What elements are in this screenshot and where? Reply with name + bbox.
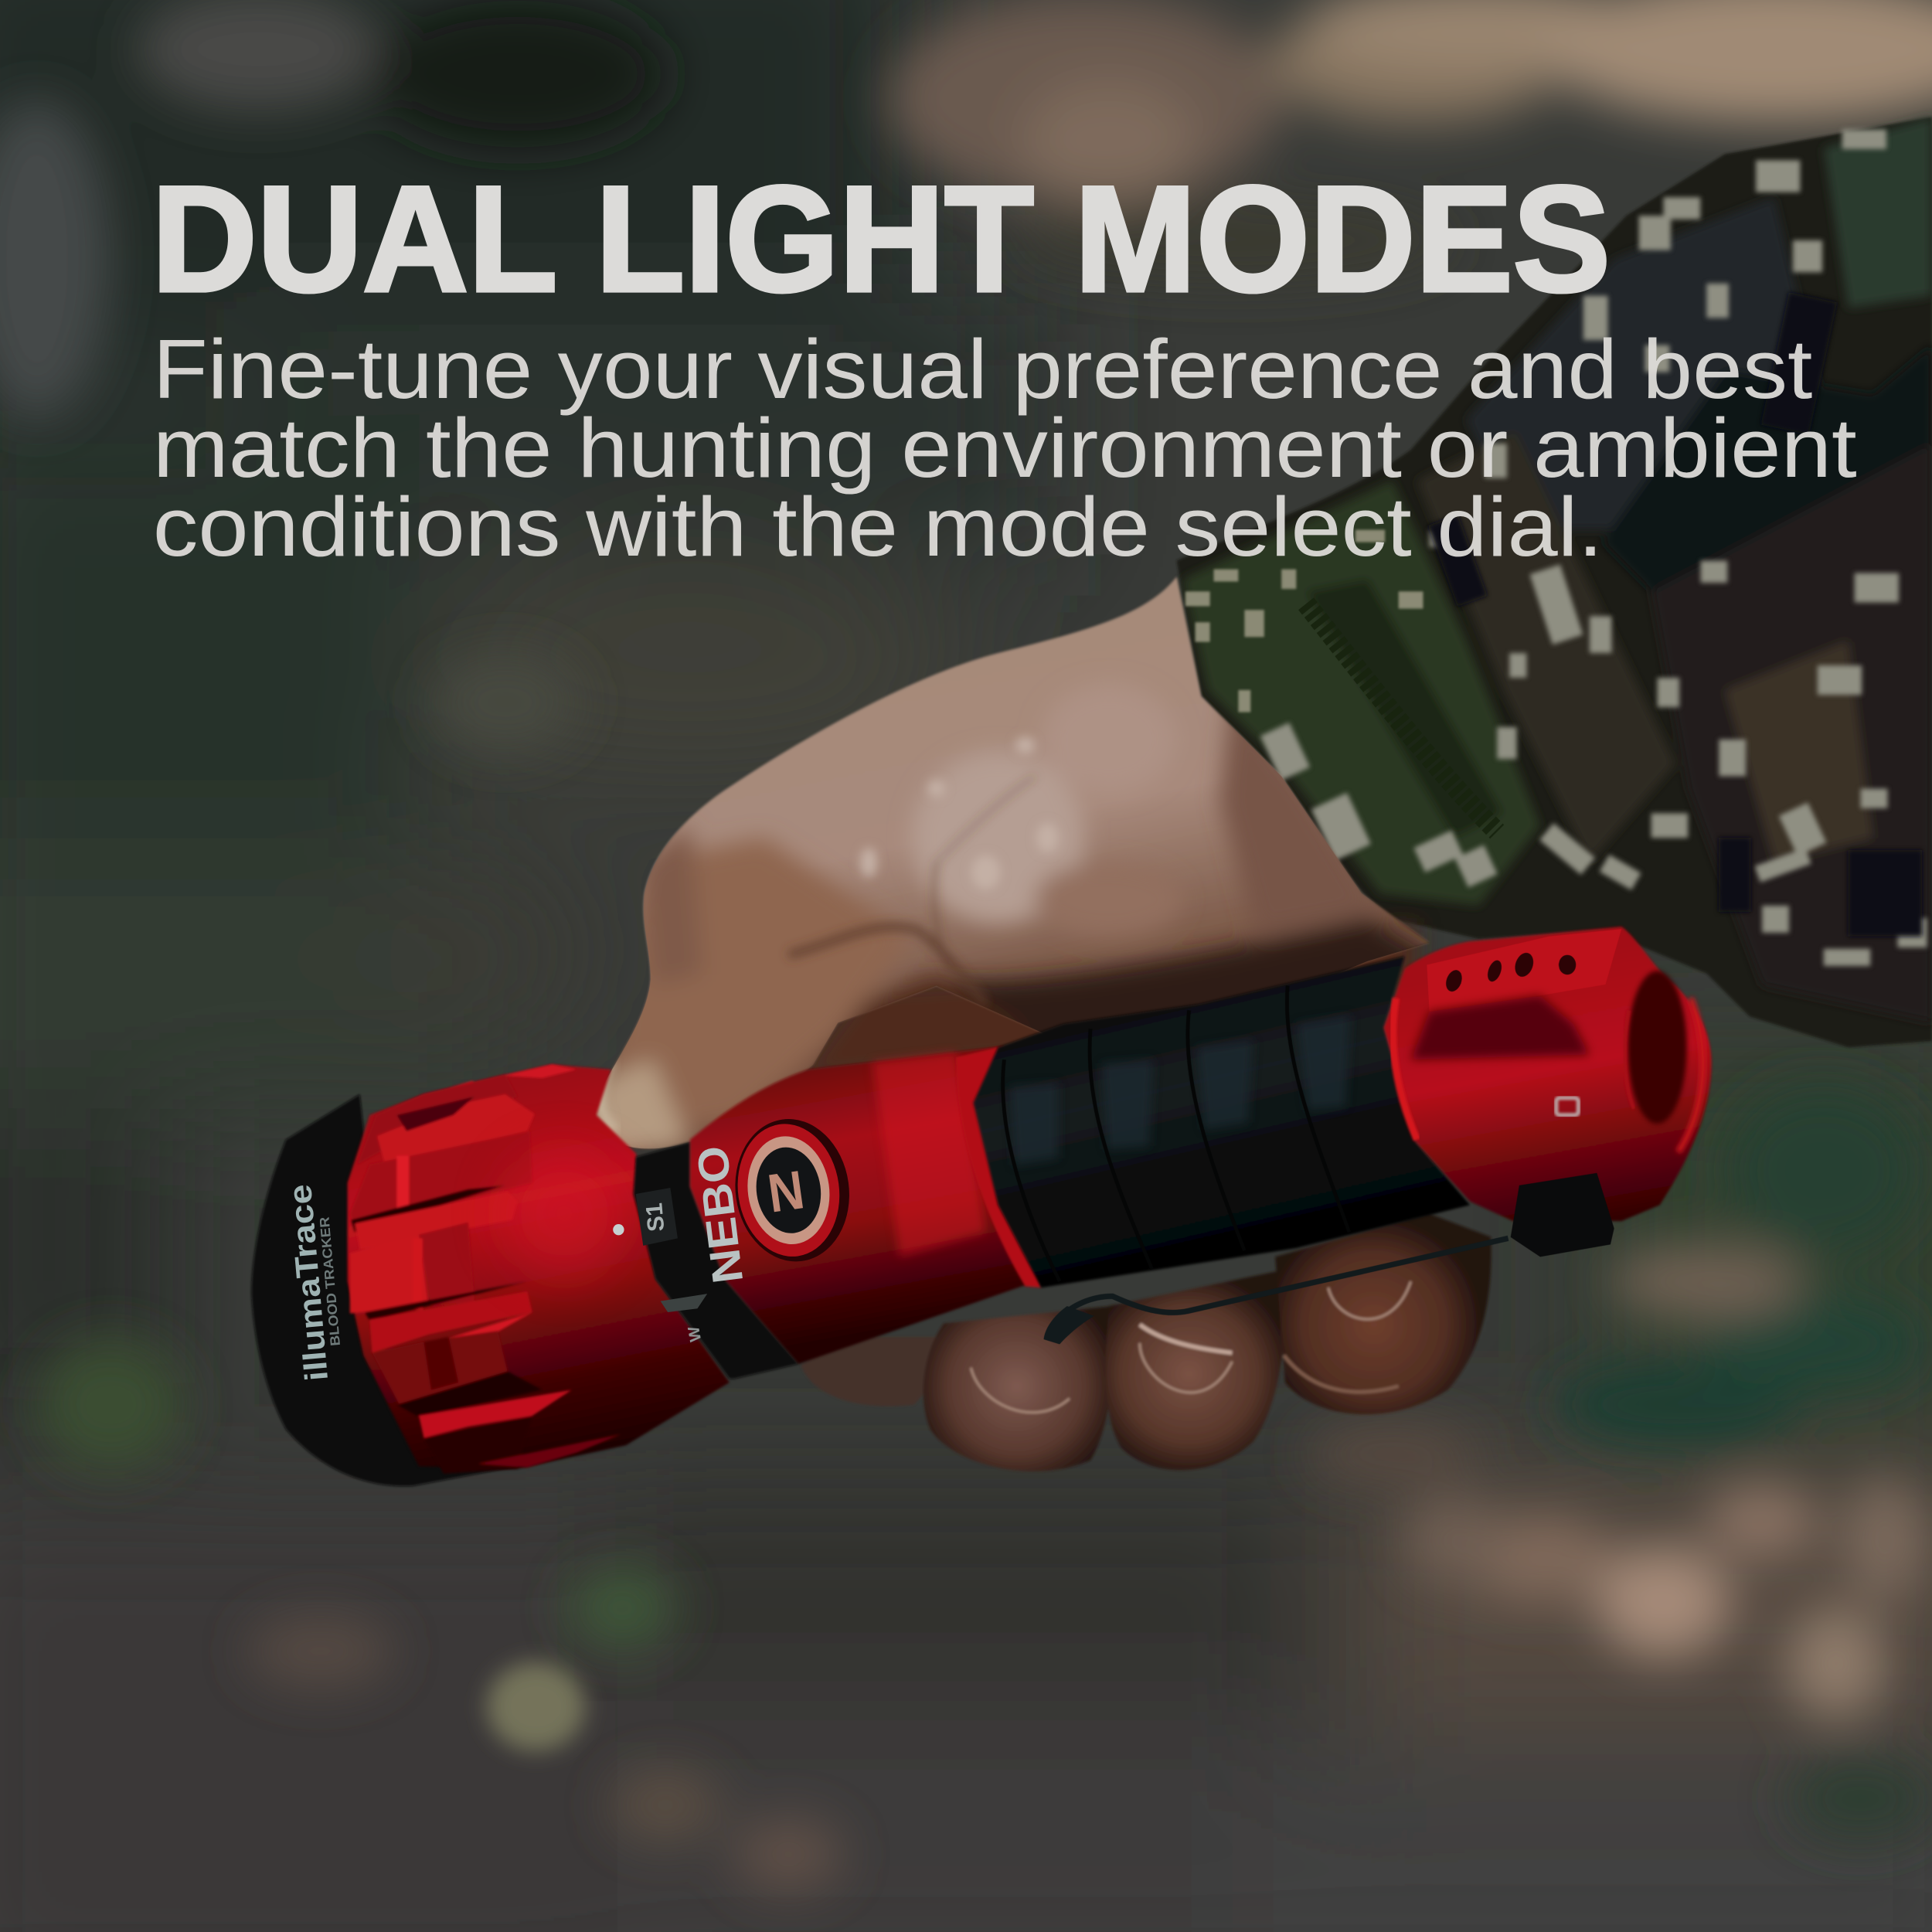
dial pointer <box>661 1294 707 1312</box>
S1 mode window: S1 <box>641 1202 669 1233</box>
sleeve zipper <box>1306 604 1497 832</box>
red tail cap <box>1383 927 1712 1221</box>
index finger <box>1275 1213 1492 1414</box>
rubber grip <box>974 956 1470 1287</box>
head ribs <box>350 1065 621 1474</box>
grip grooves <box>1003 986 1349 1281</box>
thumb tip highlight <box>600 1060 616 1131</box>
shadow and skin beneath thumb <box>788 924 1417 1084</box>
hand base <box>594 577 1429 1148</box>
ring finger <box>923 1306 1113 1471</box>
tail rim highlight <box>1393 998 1417 1140</box>
headline: DUAL LIGHT MODES <box>151 155 1611 323</box>
power button with N: N <box>764 1159 808 1224</box>
head sheen <box>503 1152 626 1275</box>
tail small mark <box>1556 1098 1578 1115</box>
power button with N <box>726 1111 859 1269</box>
S1 mode window <box>636 1188 678 1246</box>
fingernails <box>971 1281 1411 1413</box>
illumaTrace branding on bezel: BLOOD TRACKER <box>316 1216 343 1346</box>
body to grip ring <box>956 1047 1041 1287</box>
body copy: conditions with the mode select dial. <box>153 480 1603 573</box>
body copy <box>153 322 1857 573</box>
body copy: Fine-tune your visual preference and best <box>153 322 1812 416</box>
red head <box>348 1065 730 1469</box>
tail recess with lanyard holes <box>1411 929 1621 1060</box>
fingers below flashlight <box>801 1213 1492 1471</box>
camouflage sleeve <box>1177 117 1932 1047</box>
flashlight <box>251 927 1712 1486</box>
mode label: W <box>685 1325 705 1343</box>
grip segments <box>1009 1015 1350 1165</box>
tail end cap <box>1624 971 1702 1152</box>
dial ring <box>634 1142 798 1379</box>
red main body <box>690 1046 1053 1364</box>
black front bezel <box>251 1094 518 1486</box>
body highlight band <box>872 1053 986 1257</box>
NEBO logo text: NEBO <box>687 1143 752 1286</box>
illumaTrace branding on bezel: illumaTrace <box>281 1183 335 1383</box>
indicator dot <box>613 1224 624 1235</box>
middle finger <box>1106 1269 1287 1470</box>
body copy: match the hunting environment or ambient <box>153 401 1857 495</box>
hand shading <box>591 684 1441 1158</box>
hand: back of hand and thumb <box>591 577 1441 1158</box>
belt clip <box>1043 1173 1614 1344</box>
little finger <box>801 1337 974 1406</box>
